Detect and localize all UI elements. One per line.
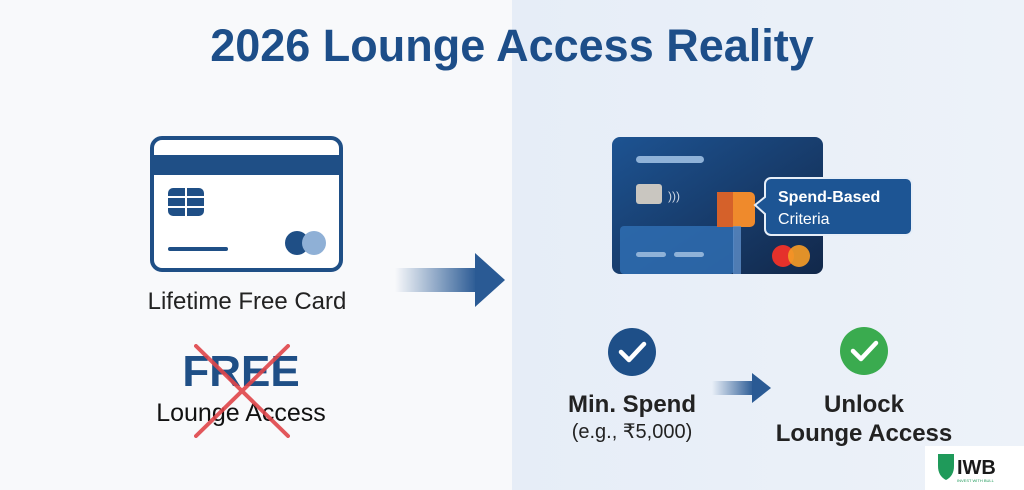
callout: spend-based criteria xyxy=(755,178,912,235)
icon: blue check xyxy=(608,328,656,376)
icon: green check xyxy=(840,327,888,375)
icon: spend-based card xyxy=(612,137,823,274)
logo: IWB: INVEST WITH BULL xyxy=(957,478,995,483)
crossed out free lounge access: Lounge Access xyxy=(156,399,326,427)
icon: lifetime free card outline xyxy=(152,138,341,270)
crossed out free lounge access: FREE xyxy=(182,347,300,396)
crossed out free lounge access xyxy=(156,346,326,436)
logo: IWB xyxy=(925,446,1024,490)
arrow: small xyxy=(712,373,771,403)
text: unlock lounge access: Lounge Access xyxy=(776,420,952,447)
callout: spend-based criteria: Spend-Based xyxy=(778,189,880,206)
text: unlock lounge access: Unlock xyxy=(824,391,905,418)
text: min spend: (e.g., ₹5,000) xyxy=(572,421,692,443)
title: 2026 Lounge Access Reality xyxy=(210,20,814,71)
text: unlock lounge access xyxy=(776,391,952,447)
arrow: main xyxy=(395,253,505,307)
text: min spend: Min. Spend xyxy=(568,391,696,418)
text: min spend xyxy=(568,391,696,443)
icon: spend-based card: ))) xyxy=(668,189,680,203)
logo: IWB: IWB xyxy=(957,457,996,479)
text: lifetime free card: Lifetime Free Card xyxy=(148,288,346,315)
callout: spend-based criteria: Criteria xyxy=(778,211,830,228)
